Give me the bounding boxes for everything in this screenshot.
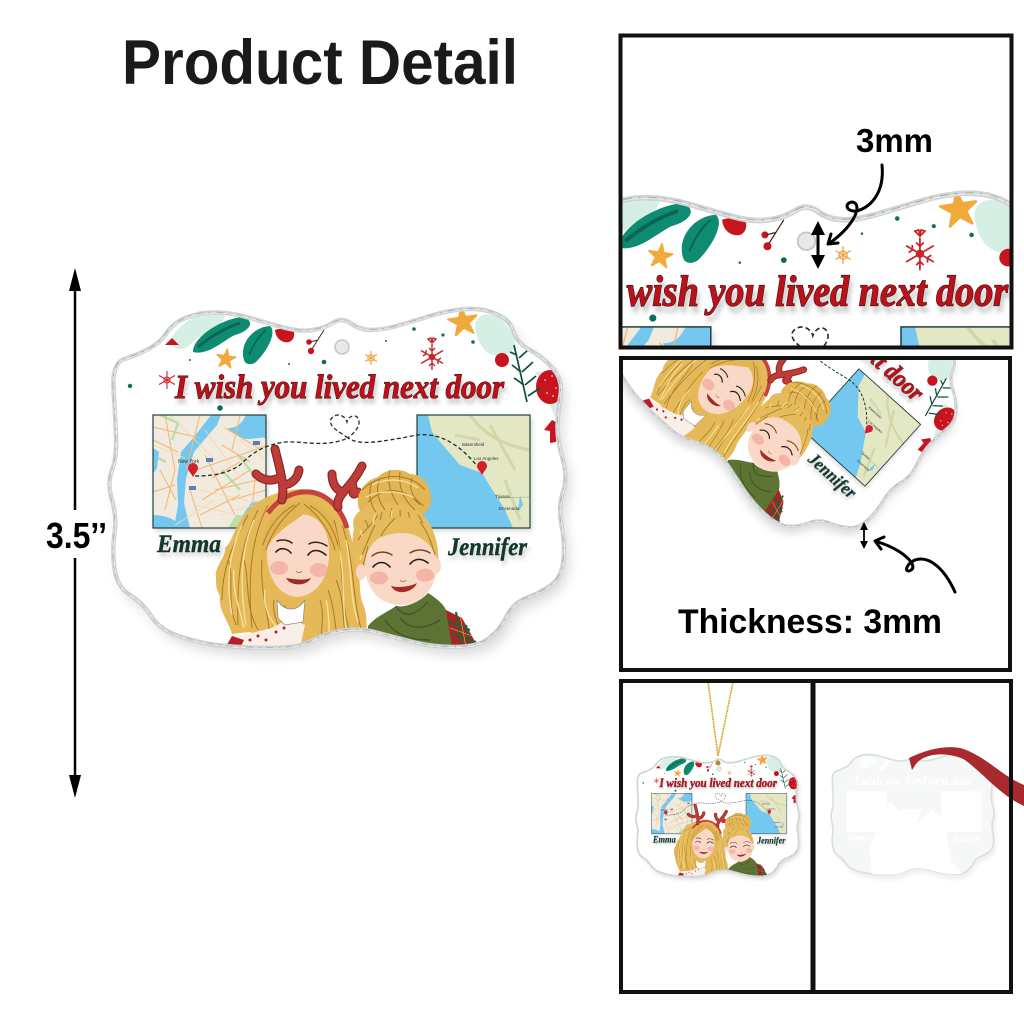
sweater — [225, 618, 305, 648]
back view ornament: Emma — [847, 832, 871, 842]
acrylic body — [110, 309, 565, 648]
snowflakes — [159, 338, 443, 389]
dashed route with heart — [195, 415, 482, 476]
ghost message: I wish you lived next door — [853, 774, 972, 788]
bun and hair — [358, 470, 431, 522]
face — [267, 514, 329, 597]
ghost shadow — [833, 758, 996, 880]
rotated ornament: Emma — [646, 303, 695, 350]
scarf — [368, 593, 478, 647]
name: Jennifer: Jennifer — [447, 534, 527, 561]
string knot — [716, 760, 720, 766]
thickness arrow — [863, 528, 865, 544]
rotated ornament: Jennifer — [804, 448, 861, 503]
map: Los Angeles — [417, 415, 532, 531]
title: Product Detail — [122, 28, 518, 98]
ghost silhouette — [846, 792, 981, 874]
stars — [215, 305, 479, 368]
headband — [268, 492, 347, 528]
label: thickness: Thickness: 3mm — [678, 603, 942, 641]
panel: top edge thickness — [618, 34, 1014, 350]
glass hole — [335, 340, 349, 354]
snow dots — [128, 327, 475, 411]
eyes, brows, mouth — [276, 549, 326, 555]
antlers — [256, 449, 362, 507]
front view ornament: Emma — [652, 834, 676, 844]
map: Los Angeles: Bakersfield — [462, 442, 485, 447]
height label: 3.5’’ — [46, 515, 107, 556]
fringe — [358, 517, 438, 560]
map: Los Angeles: Tijuana — [495, 494, 510, 499]
map: New York: New York — [178, 459, 200, 465]
eyes, brows, mouth — [373, 559, 428, 567]
red baubles and berries — [165, 329, 564, 443]
map: Los Angeles: Ensenada — [499, 506, 520, 511]
panel divider — [810, 681, 816, 992]
map pins — [188, 461, 487, 477]
bangs — [261, 500, 340, 560]
main ornament — [110, 305, 570, 656]
front view ornament — [636, 682, 801, 879]
curved pointer arrow — [875, 537, 955, 592]
gold string — [708, 682, 733, 756]
ghost body — [831, 753, 994, 875]
hair — [216, 489, 367, 648]
panel: bottom edge thickness — [619, 356, 1012, 672]
panel frame — [621, 681, 1011, 992]
red ribbon — [909, 747, 1024, 806]
rotated ornament — [623, 360, 958, 537]
height dimension arrow — [46, 268, 107, 798]
ornament message: I wish you lived next door — [174, 369, 505, 406]
rotated ornament: I wish you lived next door — [730, 224, 929, 407]
map: Los Angeles: Los Angeles — [474, 456, 499, 461]
character: woman with hair bun — [352, 470, 478, 647]
plaid shawl — [446, 610, 478, 647]
map: New York — [153, 415, 268, 531]
zoomed ornament top — [622, 190, 1010, 346]
character: woman with antlers — [216, 449, 367, 648]
acrylic edge — [110, 309, 566, 648]
ornament drop shadow — [114, 317, 570, 656]
panel: front and back views — [620, 680, 1024, 993]
pine branch — [510, 345, 540, 402]
name: Emma: Emma — [156, 531, 221, 558]
mint blobs — [170, 313, 561, 425]
front view ornament: I wish you lived next door — [658, 776, 777, 790]
back view ornament — [831, 747, 1024, 880]
face — [431, 558, 441, 574]
back view ornament: Jennifer — [951, 833, 981, 843]
curved pointer arrow — [828, 165, 882, 244]
leaves — [193, 317, 272, 364]
label: 3mm: 3mm — [856, 122, 933, 159]
front view ornament: Jennifer — [756, 835, 786, 845]
thickness arrow — [816, 232, 820, 258]
